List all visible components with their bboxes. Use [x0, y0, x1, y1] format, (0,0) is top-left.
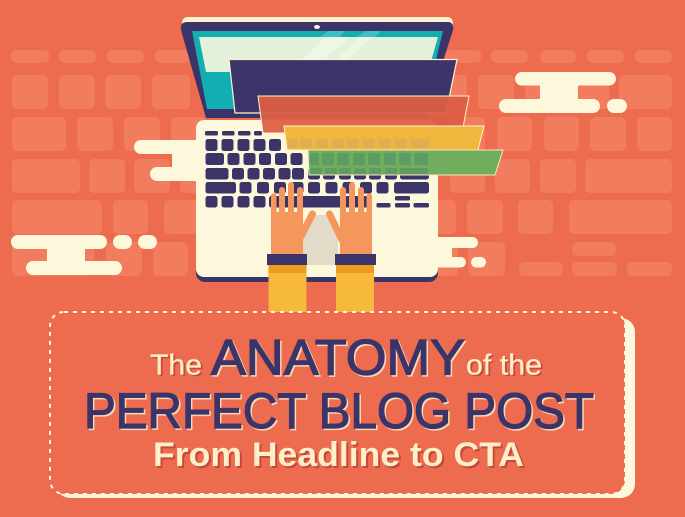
- title banner: [50, 312, 635, 498]
- subtitle: From Headline to CTA: [153, 436, 524, 474]
- right sleeve: [336, 273, 374, 312]
- title line 1: of the: [468, 351, 544, 383]
- left sleeve band: [268, 265, 306, 273]
- title line 1: The: [150, 350, 202, 382]
- floating window: yellow: [284, 126, 484, 150]
- cloud: right of laptop: [430, 237, 486, 268]
- laptop: [181, 17, 453, 312]
- title line 1: [150, 330, 544, 387]
- cloud: upper right: [499, 72, 627, 113]
- floating window: navy: [229, 60, 457, 113]
- floating window: red: [258, 96, 469, 133]
- title line 2: PERFECT BLOG POST: [86, 384, 596, 440]
- laptop base: [196, 120, 438, 282]
- banner shadow: [56, 318, 635, 498]
- title line 1: of the: [466, 350, 542, 382]
- title line 1: ANATOMY: [212, 331, 466, 387]
- right cuff: [335, 254, 376, 265]
- left thumb: [299, 214, 312, 240]
- title line 1: The: [152, 351, 204, 383]
- floating window: green: [308, 150, 503, 175]
- left sleeve: [268, 273, 306, 312]
- background keyboard keys: [11, 50, 672, 276]
- touchpad: [303, 215, 338, 265]
- cloud: lower left: [11, 235, 157, 275]
- title line 1: ANATOMY: [211, 330, 465, 386]
- left cuff: [267, 254, 307, 265]
- banner panel: [50, 312, 625, 494]
- cloud: left of laptop: [134, 140, 204, 181]
- title line 2: PERFECT BLOG POST: [84, 383, 594, 439]
- subtitle: From Headline to CTA: [155, 438, 526, 476]
- right sleeve band: [336, 265, 374, 273]
- right hand: [330, 182, 376, 312]
- keyboard keys: [205, 131, 429, 208]
- right thumb: [330, 214, 342, 240]
- laptop lid: [181, 17, 453, 118]
- left hand: [267, 182, 312, 312]
